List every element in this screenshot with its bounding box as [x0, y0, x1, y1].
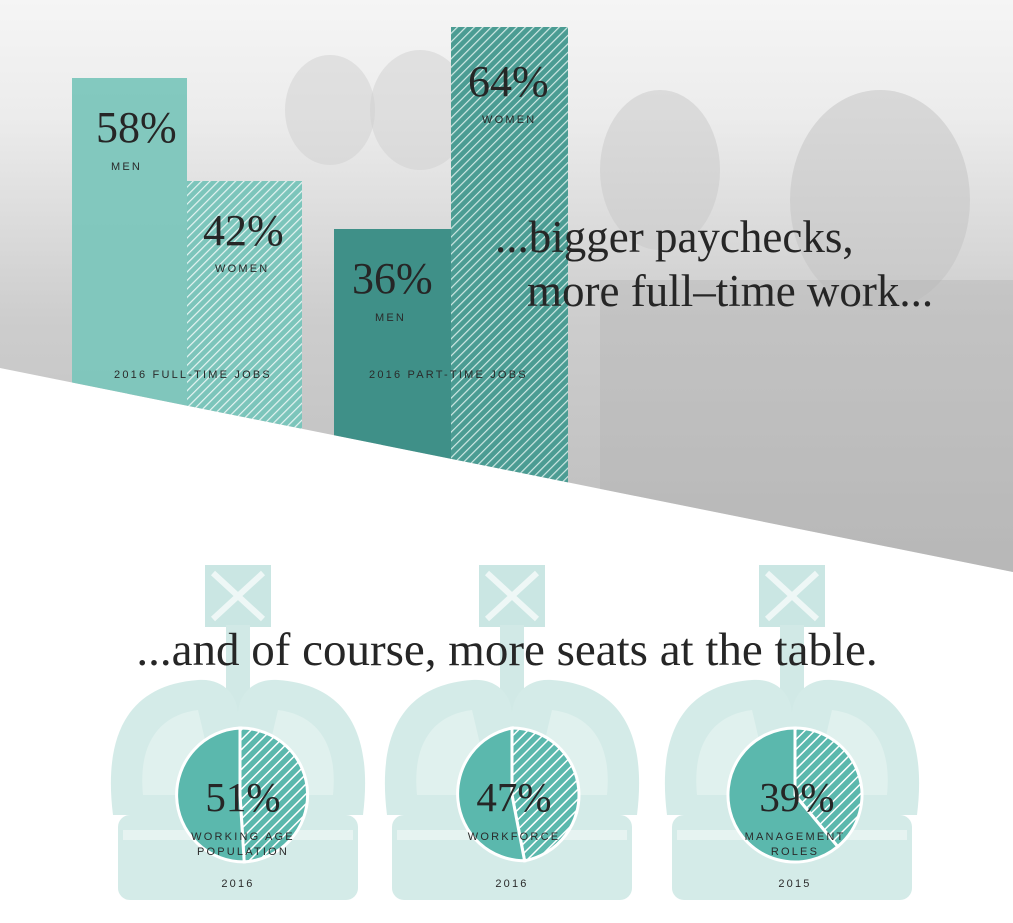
bar: part-time women 64%: WOMEN — [482, 114, 536, 126]
headline: seats at the table: ...and of course, more seats at the table. — [136, 624, 878, 676]
bar: full-time women 42% — [187, 181, 302, 428]
pie: management roles 39%: 39% — [759, 774, 835, 820]
pie: working age population 51%: 51% — [205, 774, 281, 820]
background photo area — [0, 0, 1013, 580]
pie: management roles 39%: ROLES — [771, 846, 819, 858]
bar chart: full-time and part-time jobs — [72, 27, 568, 529]
bar: part-time men 36%: 36% — [352, 254, 433, 303]
crowns background — [111, 565, 919, 900]
pie: workforce 47%: 2016 — [495, 878, 529, 890]
pie: management roles 39%: MANAGEMENT — [745, 831, 845, 843]
headline: bigger paychecks: ...bigger paychecks, — [495, 212, 854, 262]
bar: part-time men 36% — [334, 229, 451, 459]
bar: full-time men 58%: 58% — [96, 103, 177, 152]
bar: part-time women 64% — [451, 27, 568, 527]
bar: full-time women 42%: WOMEN — [215, 263, 269, 275]
headline: bigger paychecks: more full–time work... — [527, 266, 933, 316]
pie: workforce 47%: WORKFORCE — [468, 831, 560, 843]
label: 2016 full-time jobs: 2016 FULL-TIME JOBS — [114, 369, 272, 381]
bar: full-time men 58%: MEN — [111, 161, 142, 173]
pie: management roles 39% — [728, 728, 862, 890]
headline: bigger paychecks — [495, 212, 933, 316]
pie: working age population 51%: WORKING AGE — [191, 831, 295, 843]
bar: part-time men 36%: MEN — [375, 312, 406, 324]
bar: full-time women 42%: 42% — [203, 206, 284, 255]
pie: working age population 51%: 2016 — [221, 878, 255, 890]
pie: working age population 51%: POPULATION — [197, 846, 289, 858]
pie: working age population 51% — [177, 728, 308, 890]
bar: full-time men 58% — [72, 78, 187, 406]
pie: management roles 39%: 2015 — [778, 878, 812, 890]
pie: workforce 47% — [458, 728, 579, 890]
pie: workforce 47%: 47% — [476, 774, 552, 820]
bar: part-time women 64%: 64% — [468, 57, 549, 106]
label: 2016 part-time jobs: 2016 PART-TIME JOBS — [369, 369, 528, 381]
